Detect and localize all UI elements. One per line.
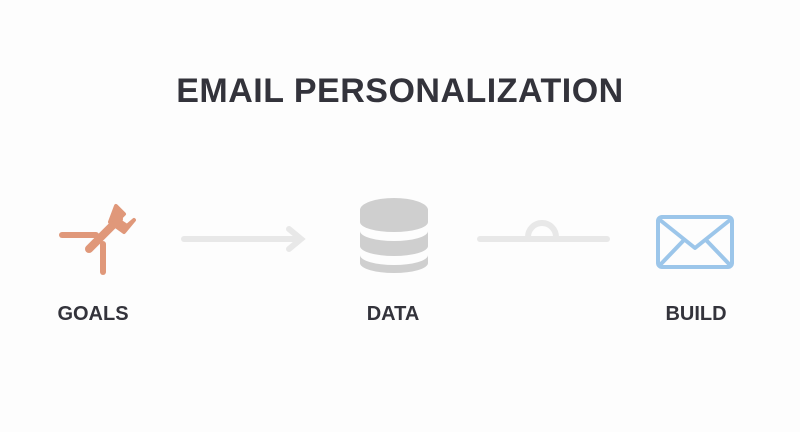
icon: database: [360, 198, 428, 273]
title: EMAIL PERSONALIZATION: [176, 72, 624, 110]
label: build: BUILD: [665, 303, 727, 325]
icon: envelope: [658, 217, 732, 267]
label: data: DATA: [367, 303, 419, 325]
arrow: goals to data: [184, 229, 301, 249]
icon: goals wrench: [62, 206, 134, 272]
label: goals: GOALS: [57, 303, 129, 325]
connector: data to build: [480, 223, 607, 239]
